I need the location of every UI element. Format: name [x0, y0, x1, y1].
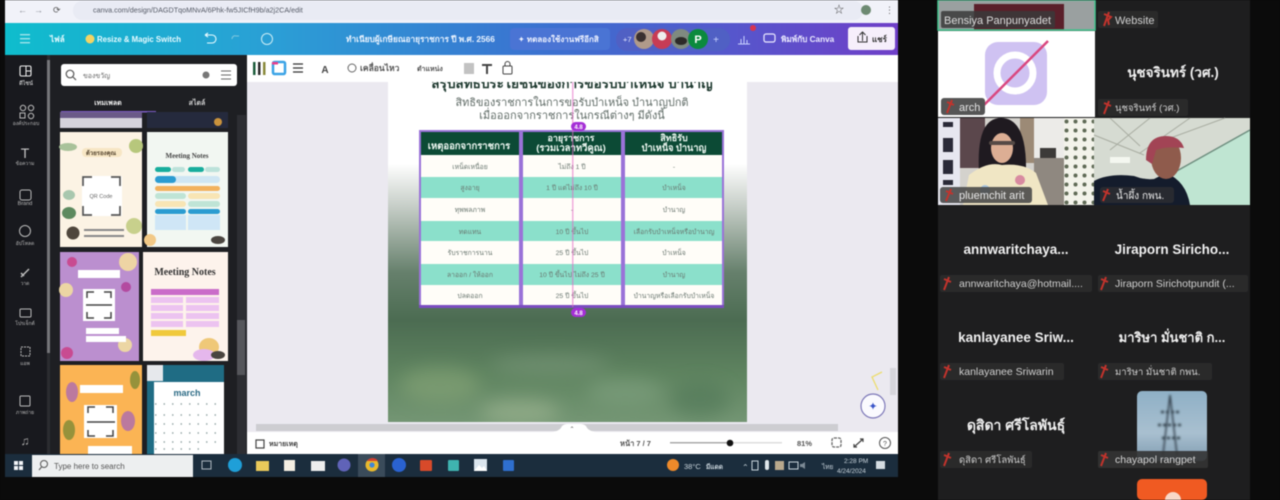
windows taskbar: มีแดด	[706, 463, 723, 471]
participant: kanlayanee Sriwarin: kanlayanee Sriw...	[958, 330, 1074, 345]
browser address bar: ☆	[834, 4, 844, 16]
table body cells: -	[673, 164, 675, 171]
participant: arch: arch	[959, 102, 980, 114]
alignment guide with spacing badges: 4.8	[574, 311, 583, 317]
browser address bar: ←	[18, 5, 27, 15]
table header row: อายุราชการ	[547, 133, 595, 144]
slide subtitle: สิทธิของราชการในการขอรับบำเหน็จ บำนาญปกติ	[456, 95, 688, 109]
template: meeting notes blue: Meeting Notes	[166, 152, 209, 160]
participant: kanlayanee Sriwarin: kanlayanee Sriwarin	[959, 366, 1054, 378]
participant: Website	[1098, 11, 1158, 28]
left icon rail: Brand	[18, 201, 32, 207]
slide page	[388, 74, 747, 424]
panel scrollbar	[237, 115, 246, 454]
table header row: (รวมเวลาทวีคูณ)	[536, 142, 606, 155]
left icon rail: ภาพถ่าย	[16, 410, 34, 416]
editor toolbar: A	[321, 65, 329, 76]
table body cells: บำนาญ	[663, 271, 685, 279]
browser address bar: →	[34, 5, 43, 15]
table body cells: 10 ปี ขึ้นไป ไม่ถึง 25 ปี	[539, 269, 605, 279]
participant: Website: Website	[1115, 15, 1155, 27]
template: march calendar	[147, 365, 224, 454]
participant: ดุสิดา ศรีโลพันธุ์: ดุสิดา ศรีโลพันธุ์	[967, 416, 1065, 434]
participant: น้ำผึ้ง กพน.: น้ำผึ้ง กพน.	[1116, 188, 1164, 202]
template: march calendar: march	[173, 388, 201, 398]
template: orange QR	[60, 365, 142, 454]
left icon rail: ข้อความ	[16, 160, 34, 167]
table body cells: เลือกรับบำเหน็จหรือบำนาญ	[634, 227, 715, 236]
editor bottom bar: ?	[883, 441, 887, 448]
table header row: บำเหน็จ บำนาญ	[642, 141, 706, 154]
participant: ดุสิดา ศรีโลพันธุ์	[940, 416, 1065, 468]
windows taskbar: ⌃	[742, 463, 749, 472]
left icon rail	[5, 55, 51, 454]
browser address bar: ⟳	[53, 5, 61, 15]
windows taskbar: 4/24/2024	[837, 468, 866, 475]
participant: annwaritchaya: annwaritchaya@hotmail....	[959, 278, 1083, 290]
template: meeting notes pink: Meeting Notes	[154, 267, 216, 278]
participant: Jiraporn Sirichotpundit: Jiraporn Sirichotpundit (...	[1115, 278, 1235, 290]
editor bottom bar: 81%	[797, 439, 812, 448]
panel tabs	[61, 98, 205, 112]
participant: Bensiya Panpunyadet	[938, 0, 1095, 30]
editor bottom bar	[247, 432, 898, 454]
search box: ของขวัญ	[83, 72, 110, 80]
canva top header	[5, 23, 898, 55]
editor toolbar: เคลื่อนไหว	[360, 61, 400, 73]
left icon rail: ♫	[20, 434, 30, 448]
windows taskbar: 38°C	[684, 462, 701, 471]
template: meeting notes pink	[143, 252, 228, 361]
participant: มาริษา มั่นชาติ: มาริษา มั่นชาติ ก...	[1119, 328, 1225, 345]
template: purple QR	[59, 252, 139, 361]
table body cells: 25 ปี ขึ้นไป	[556, 290, 588, 300]
table body cells: บำเหน็จ	[662, 183, 686, 192]
left icon rail: วาด	[21, 281, 29, 287]
table body cells: รับราชการนาน	[448, 249, 493, 257]
table header row: เหตุออกจากราชการ	[428, 141, 511, 152]
pension rights table	[419, 130, 724, 308]
participant: นุชจรินทร์ (วศ.)	[1098, 64, 1219, 116]
browser address bar	[5, 0, 898, 23]
table header row: สิทธิรับ	[660, 133, 688, 143]
panel tabs: สไตล์	[189, 98, 205, 107]
table body cells: 10 ปี ขึ้นไป	[556, 226, 588, 236]
participant: annwaritchaya	[940, 242, 1092, 292]
participant: Bensiya Panpunyadet: Bensiya Panpunyadet	[944, 15, 1051, 27]
participant: Jiraporn Sirichotpundit	[1098, 242, 1248, 292]
participant: chayapol rangpet: chayapol rangpet	[1115, 454, 1196, 466]
canvas scrollbars	[247, 368, 898, 433]
template: meeting notes blue	[144, 132, 228, 247]
editor toolbar	[247, 55, 898, 82]
participant: kanlayanee Sriwarin	[940, 330, 1074, 380]
alignment guide with spacing badges: 4.8	[574, 125, 583, 131]
participant: chayapol rangpet	[1098, 391, 1208, 468]
table body cells: ปลดออก	[457, 293, 483, 300]
search box	[61, 64, 237, 86]
table body cells: บำนาญ	[663, 206, 685, 214]
table body cells: สูงอายุ	[460, 185, 480, 192]
table body cells: ทดแทน	[459, 229, 482, 236]
template side panel	[50, 55, 253, 454]
participant: ดุสิดา ศรีโลพันธุ์: ดุสิดา ศรีโลพันธุ์	[959, 454, 1026, 466]
slide subtitle: เมื่อออกจากราชการในกรณีต่างๆ มีดังนี้	[479, 107, 665, 122]
panel tabs: เทมเพลต	[94, 100, 122, 107]
canva top header: ทำเนียบผู้เกษียณอายุราชการ ปี พ.ศ. 2566	[346, 34, 495, 45]
browser address bar: ⋮	[885, 5, 894, 15]
taskbar search	[32, 455, 193, 477]
taskbar search: Type here to search	[54, 462, 125, 471]
participant: มาริษา มั่นชาติ	[1098, 328, 1225, 380]
windows taskbar	[5, 454, 898, 477]
table body cells: ไม่ถึง 1 ปี	[557, 163, 586, 171]
left icon rail: T	[21, 145, 30, 161]
canva top header: ไฟล์	[49, 34, 65, 44]
canva top header: +	[713, 35, 719, 46]
canva top header: แชร์	[872, 34, 888, 44]
participant: orange avatar	[1137, 479, 1207, 500]
left icon rail: องค์ประกอบ	[13, 120, 39, 127]
table body cells	[447, 162, 715, 300]
table body cells: 1 ปี แต่ไม่ถึง 10 ปี	[546, 184, 598, 192]
table body cells: 25 ปี ขึ้นไป	[556, 247, 588, 257]
editor toolbar: ตำแหน่ง	[417, 65, 443, 73]
blurred meadow photo	[400, 355, 730, 424]
participant: pluemchit arit	[938, 118, 1094, 205]
table body cells: เหน็ดเหนื่อย	[452, 162, 488, 171]
zoom gallery sidebar	[938, 0, 1250, 500]
participant: Jiraporn Sirichotpundit: Jiraporn Siricho...	[1115, 242, 1229, 257]
editor bottom bar: หน้า 7 / 7	[620, 439, 651, 448]
table body cells: บำเหน็จ	[662, 248, 686, 257]
table body cells: ทุพพลภาพ	[455, 207, 485, 214]
left icon rail: ดีไซน์	[19, 80, 33, 87]
table header row	[428, 133, 706, 155]
left icon rail: โปรเจ็กต์	[15, 319, 35, 327]
participant: นุชจรินทร์ (วศ.): นุชจรินทร์ (วศ.)	[1127, 64, 1219, 81]
canva top header: +7	[623, 35, 632, 44]
magic assistant button	[861, 372, 885, 418]
template thumbnails	[59, 112, 228, 454]
participant: pluemchit arit: pluemchit arit	[959, 190, 1024, 202]
participant: annwaritchaya: annwaritchaya...	[963, 242, 1069, 257]
canva top header: Resize & Magic Switch	[97, 35, 181, 44]
windows taskbar: ไทย	[821, 463, 834, 471]
canva top header: ✦ ทดลองใช้งานฟรีอีกสิ	[518, 34, 599, 44]
template: QR thank you card: ด้วยรองคุณ	[86, 149, 116, 157]
table body cells: -	[571, 207, 573, 214]
windows taskbar: 2:28 PM	[844, 458, 868, 465]
participant: น้ำผึ้ง กพน.	[1094, 118, 1250, 205]
alignment guide with spacing badges	[571, 82, 586, 317]
slide subtitle	[456, 95, 688, 122]
participant: arch	[938, 31, 1095, 117]
slide title: สรุปสิทธิประโยชน์ของการขอรับบำเหน็จ บำนาญ	[431, 74, 713, 92]
canva top header: พิมพ์กับ Canva	[781, 34, 835, 44]
left icon rail: อัปโหลด	[16, 240, 34, 247]
magic assistant button: ✦	[868, 401, 878, 413]
canvas scrollbars: ⌃	[569, 426, 575, 433]
table body cells: บำนาญหรือเลือกรับบำเหน็จ	[634, 291, 714, 300]
editor bottom bar: หมายเหตุ	[269, 441, 298, 448]
participant: มาริษา มั่นชาติ: มาริษา มั่นชาติ กพน.	[1115, 365, 1200, 378]
browser address bar: canva.com/design/DAGDTqoMNvA/6Phk-fw5JICfH9b/a2j2CA/edit	[93, 6, 303, 14]
table body cells: ลาออก / ให้ออก	[447, 271, 493, 279]
template: QR thank you card	[59, 132, 143, 247]
canvas workspace	[247, 82, 898, 430]
canva top header: P	[694, 34, 702, 46]
template: QR thank you card: QR Code	[90, 194, 112, 200]
left icon rail: แอพ	[20, 361, 30, 367]
table backgrounds	[421, 132, 722, 305]
participant: นุชจรินทร์ (วศ.): นุชจรินทร์ (วศ.)	[1115, 102, 1179, 114]
